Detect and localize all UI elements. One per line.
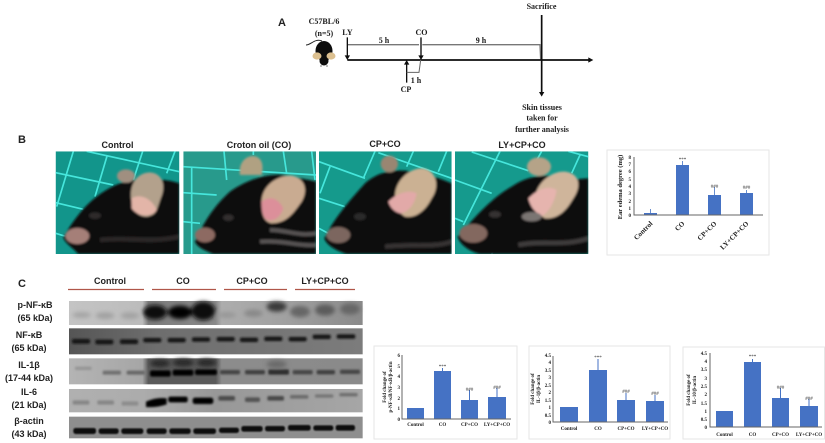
timeline labels [342, 2, 569, 134]
chart: IL-1b fold change: LY+CP+CO [642, 427, 668, 432]
chart: p-NF-kB fold change: LY+CP+CO [484, 423, 510, 428]
chart: IL-1b fold change: 1 [548, 406, 552, 411]
blot row labels: p-NF-κB [17, 300, 53, 310]
chart: IL-1b fold change: Fold change of [531, 373, 536, 405]
chart: IL-6 fold change: Fold change of [687, 374, 692, 406]
chart: IL-6 fold change: ### [777, 386, 785, 391]
photo: LY plus CP plus CO [455, 151, 588, 254]
chart: ear edema: *** [679, 158, 687, 163]
photo captions: CP+CO [369, 139, 401, 149]
chart: IL-6 fold change: 3.5 [701, 368, 708, 373]
timeline labels: Skin tissues [522, 103, 562, 112]
chart: p-NF-kB fold change [374, 346, 517, 439]
icon: mouse [306, 40, 336, 67]
chart: p-NF-kB fold change: 5 [398, 365, 400, 370]
chart: ear edema: 4 [628, 185, 632, 190]
blot row labels: (17-44 kDa) [5, 373, 53, 383]
chart: p-NF-kB fold change: 1 [398, 407, 400, 412]
panel A: experimental timeline [278, 2, 593, 134]
photo captions: Control [102, 140, 134, 150]
chart: IL-1b fold change: *** [594, 356, 602, 361]
photo captions: Croton oil (CO) [227, 140, 291, 150]
blot row labels: (21 kDa) [11, 400, 47, 410]
timeline labels: further analysis [515, 125, 569, 134]
chart: IL-6 fold change: Control [716, 433, 733, 438]
chart: ear edema: 5 [628, 178, 632, 183]
blot group headers: CO [176, 276, 190, 286]
chart: ear edema: 8 [628, 156, 632, 161]
chart: p-NF-kB fold change: 0 [398, 418, 400, 423]
photo: CP plus CO [319, 151, 452, 254]
chart: p-NF-kB fold change: 4 [398, 375, 400, 380]
blot row labels: NF-κB [16, 330, 43, 340]
timeline labels: 9 h [476, 36, 487, 45]
chart: p-NF-kB fold change: 6 [398, 354, 400, 359]
blot: NF-kB [69, 328, 363, 354]
chart: IL-6 fold change: *** [749, 355, 757, 360]
chart: IL-6 fold change: 0.5 [701, 418, 708, 423]
western blots [69, 301, 363, 438]
photo: control [56, 151, 179, 254]
timeline labels: 5 h [379, 36, 390, 45]
chart: IL-1b fold change: IL-1β/β-actin [537, 375, 542, 403]
chart: p-NF-kB fold change: Fold change of [383, 371, 388, 403]
chart: ear edema [607, 150, 769, 255]
chart: IL-6 fold change: IL-10/β-actin [693, 376, 698, 404]
blot group headers: Control [94, 276, 126, 286]
chart: IL-1b fold change: 4 [548, 361, 552, 366]
chart: IL-1b fold change: 0 [548, 421, 552, 426]
panel B: mouse ear photographs [18, 134, 769, 255]
chart: ear edema: 7 [628, 163, 632, 168]
blot: IL-1b [69, 358, 363, 384]
panel letter B: B [18, 134, 26, 146]
blot group headers: LY+CP+CO [301, 276, 349, 286]
chart: ear edema: 1 [628, 207, 632, 212]
blot: IL-6 [69, 389, 363, 412]
chart: IL-6 fold change: 1 [704, 410, 708, 415]
blot row labels: IL-1β [18, 360, 40, 370]
timeline labels: 1 h [411, 76, 422, 85]
chart: IL-6 fold change: ### [805, 397, 813, 402]
chart: IL-6 fold change: 2 [704, 393, 708, 398]
strain label: C57BL/6 [309, 17, 339, 26]
blot row labels: β-actin [14, 416, 44, 426]
panel letter C: C [18, 278, 26, 290]
chart: IL-6 fold change: CO [749, 433, 756, 438]
timeline labels: CO [416, 28, 428, 37]
chart: p-NF-kB fold change: p-NF-κB/NF-κB/β-actin [389, 361, 394, 412]
chart: IL-6 fold change: LY+CP+CO [796, 433, 822, 438]
chart: IL-6 fold change: 1.5 [701, 402, 708, 407]
chart: IL-1b fold change: ### [622, 390, 630, 395]
timeline labels: CP [401, 85, 411, 94]
strain label: (n=5) [315, 29, 334, 38]
blot group headers: CP+CO [236, 276, 268, 286]
chart: IL-1b fold change: 1.5 [545, 399, 552, 404]
timeline labels: taken for [526, 114, 558, 122]
chart: ear edema: 3 [628, 192, 632, 197]
timeline labels: Sacrifice [527, 2, 557, 11]
photo captions [102, 139, 546, 150]
blot: beta-actin [69, 417, 363, 438]
chart: IL-6 fold change [683, 347, 824, 439]
chart: p-NF-kB fold change: 2 [398, 397, 400, 402]
chart: ear edema: CO [673, 219, 687, 233]
chart: ear edema: LY+CP+CO [719, 219, 751, 251]
chart: IL-6 fold change: 3 [704, 377, 708, 382]
chart: IL-1b fold change: 2.5 [545, 384, 552, 389]
chart: p-NF-kB fold change: Control [407, 423, 424, 428]
chart: ear edema: CP+CO [696, 219, 719, 242]
photo captions: LY+CP+CO [498, 140, 546, 150]
panel letter A: A [278, 17, 286, 29]
chart: IL-1b fold change: 3 [548, 376, 552, 381]
chart: ear edema: Ear edema degree (mg) [617, 155, 624, 219]
chart: IL-1b fold change [529, 346, 670, 439]
blot row labels: (43 kDa) [11, 429, 47, 439]
chart: ear edema: ### [743, 186, 751, 191]
blot row labels [5, 300, 53, 439]
chart: IL-6 fold change: 2.5 [701, 385, 708, 390]
chart: ear edema: 0 [628, 214, 632, 219]
photo: croton oil [183, 151, 316, 254]
blot row labels: IL-6 [21, 387, 37, 397]
chart: IL-1b fold change: 2 [548, 391, 552, 396]
chart: ear edema: Control [632, 220, 654, 242]
chart: IL-6 fold change: CP+CO [772, 433, 789, 438]
blot row labels: (65 kDa) [11, 343, 47, 353]
timeline labels: LY [342, 28, 353, 37]
chart: ear edema: 2 [628, 200, 632, 205]
chart: IL-1b fold change: ### [651, 392, 659, 397]
chart: IL-1b fold change: CP+CO [617, 427, 635, 432]
chart: IL-6 fold change: 0 [704, 426, 708, 431]
chart: IL-1b fold change: 0.5 [545, 414, 552, 419]
chart: IL-1b fold change: Control [561, 427, 578, 432]
panel C: western blots and quantification [5, 276, 824, 439]
blot: p-NF-kB [69, 301, 363, 325]
timeline diagram [345, 15, 593, 97]
chart: ear edema: ### [711, 185, 719, 190]
chart: IL-1b fold change: CO [594, 427, 602, 432]
chart: p-NF-kB fold change: *** [439, 365, 447, 370]
chart: IL-1b fold change: 3.5 [545, 369, 552, 374]
chart: p-NF-kB fold change: CP+CO [461, 423, 478, 428]
chart: IL-6 fold change: 4 [704, 360, 708, 365]
chart: IL-6 fold change: 4.5 [701, 352, 708, 357]
chart: IL-1b fold change: 4.5 [545, 354, 552, 359]
chart: p-NF-kB fold change: CO [439, 423, 446, 428]
blot group headers [68, 276, 355, 290]
chart: p-NF-kB fold change: ### [466, 388, 474, 393]
blot row labels: (65 kDa) [17, 313, 53, 323]
chart: ear edema: 6 [628, 170, 632, 175]
chart: p-NF-kB fold change: 3 [398, 386, 400, 391]
chart: p-NF-kB fold change: ### [493, 386, 501, 391]
